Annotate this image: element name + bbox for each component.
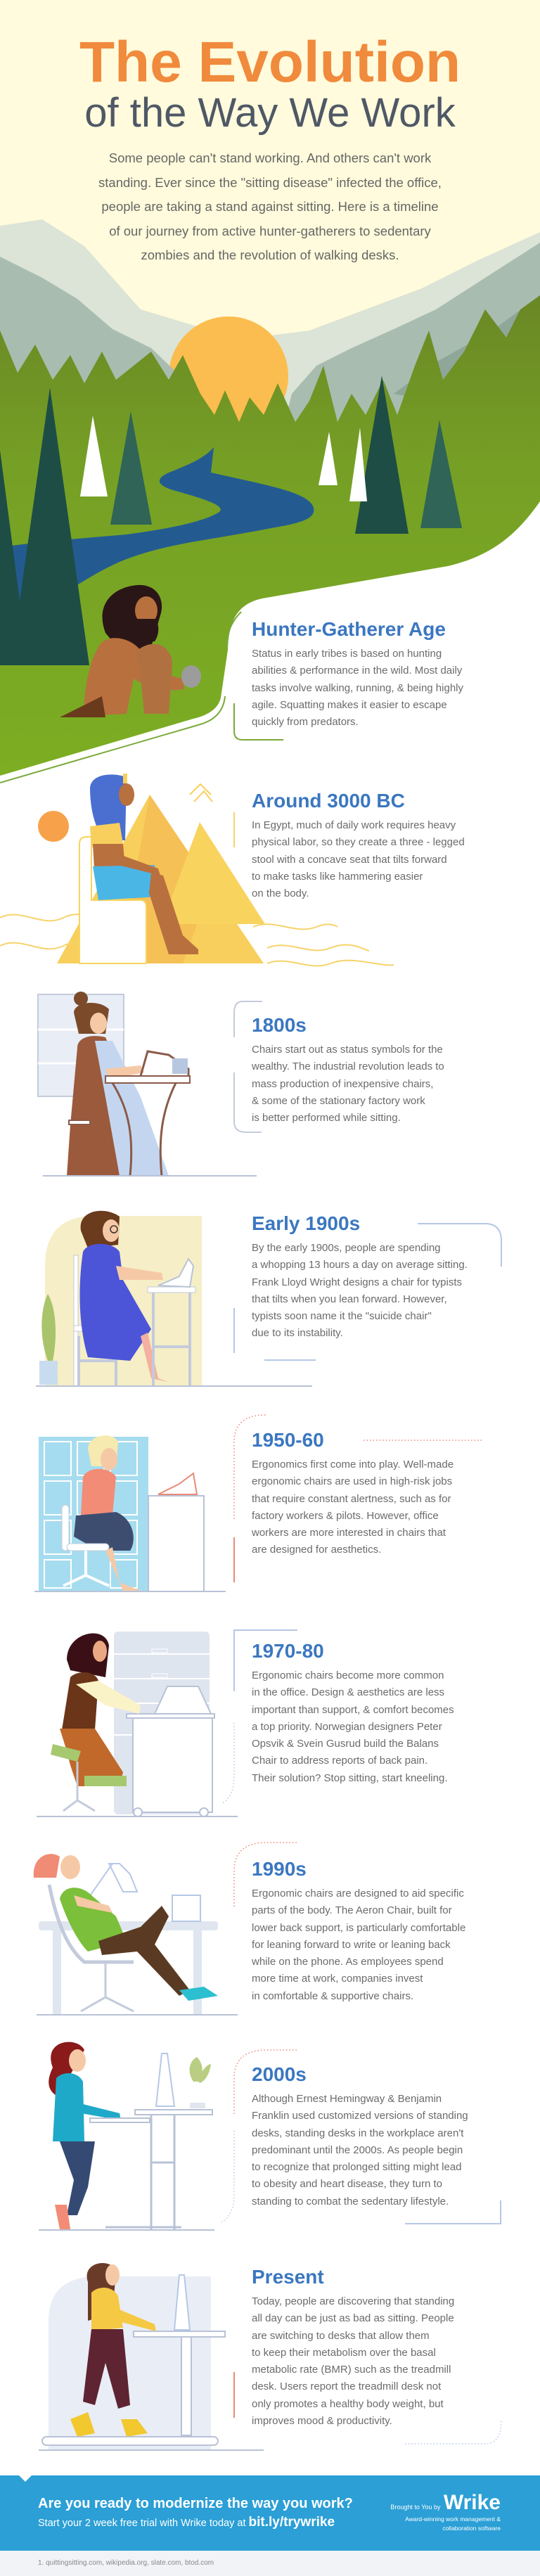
section: 1800s: is better performed while sitting. bbox=[252, 1112, 401, 1124]
section: early 1900s: By the early 1900s, people are spending bbox=[252, 1242, 441, 1254]
section: present: Today, people are discovering that standing bbox=[252, 2295, 454, 2307]
section: early 1900s: Frank Lloyd Wright designs a chair for typists bbox=[252, 1276, 462, 1288]
section: early 1900s: that tilts when you lean forward. However, bbox=[252, 1293, 447, 1305]
section: 1990s: in comfortable & supportive chairs. bbox=[252, 1990, 413, 2002]
intro paragraph: zombies and the revolution of walking desks. bbox=[141, 248, 399, 262]
hunter gatherer figure bbox=[60, 585, 201, 717]
section: around 3000 BC: Around 3000 BC bbox=[252, 790, 405, 812]
section: 1970-80: a top priority. Norwegian designers Peter bbox=[252, 1721, 442, 1733]
section: 1950-60: ergonomic chairs are used in high-risk jobs bbox=[252, 1475, 452, 1487]
bracket: hunter bbox=[226, 611, 283, 741]
section: 1990s bbox=[252, 1858, 465, 2002]
section: 1970-80: Ergonomic chairs become more common bbox=[252, 1670, 444, 1681]
section: around 3000 BC: stool with a concave seat that tilts forward bbox=[252, 854, 447, 866]
section: 2000s: predominant until the 2000s. As people begin bbox=[252, 2144, 463, 2156]
section: 1800s: 1800s bbox=[252, 1014, 307, 1036]
section: 2000s: Although Ernest Hemingway & Benjamin bbox=[252, 2093, 442, 2105]
section: early 1900s: Early 1900s bbox=[252, 1212, 360, 1234]
section: 1800s: wealthy. The industrial revolution leads to bbox=[252, 1060, 444, 1072]
section: present: desk. Users report the treadmill desk not bbox=[252, 2380, 441, 2392]
section: hunter-gatherer age: quickly from predators. bbox=[252, 716, 359, 728]
sources footer: 1. quittingsitting.com, wikipedia.org, slate.com, btod.com bbox=[38, 2559, 214, 2567]
section: 1990s: parts of the body. The Aeron Chair, built for bbox=[252, 1904, 452, 1916]
section: hunter-gatherer age: Hunter-Gatherer Age bbox=[252, 618, 446, 640]
section: present: metabolic rate (BMR) such as the treadmill bbox=[252, 2364, 451, 2376]
section: present: improves mood & productivity. bbox=[252, 2415, 392, 2427]
section: around 3000 BC: physical labor, so they create a three - legged bbox=[252, 836, 465, 848]
section: present bbox=[252, 2266, 454, 2427]
cta heading: Are you ready to modernize the way you work? bbox=[38, 2496, 353, 2511]
section: around 3000 BC: to make tasks like hammering easier bbox=[252, 871, 423, 883]
bracket: 1800s bbox=[233, 1001, 262, 1133]
bracket: 1990s bbox=[233, 1842, 297, 1907]
section: 1800s: Chairs start out as status symbols for the bbox=[252, 1044, 443, 1056]
section: 1990s: for leaning forward to write or leaning back bbox=[252, 1939, 451, 1951]
intro paragraph: of our journey from active hunter-gatherers to sedentary bbox=[109, 224, 431, 238]
section: 1970-80: 1970-80 bbox=[252, 1640, 324, 1662]
section: 1800s bbox=[252, 1014, 444, 1124]
section: 1970-80: Chair to address reports of back pain. bbox=[252, 1755, 428, 1767]
sun bbox=[169, 316, 288, 436]
section: 1950-60: Ergonomics first come into play. Well-made bbox=[252, 1459, 454, 1470]
bracket: 3000 BC bbox=[233, 812, 235, 847]
intro paragraph bbox=[98, 150, 442, 262]
section: 1970-80: Opsvik & Svein Gusrud build the Balans bbox=[252, 1738, 439, 1750]
illustration: 2000s bbox=[39, 2042, 214, 2231]
section: 1970-80 bbox=[252, 1640, 454, 1784]
section: 1950-60: that require constant alertness, such as for bbox=[252, 1493, 451, 1505]
section: around 3000 BC: In Egypt, much of daily work requires heavy bbox=[252, 819, 456, 831]
section: 2000s: 2000s bbox=[252, 2063, 307, 2085]
section: hunter-gatherer age bbox=[252, 618, 463, 728]
section: early 1900s: a whopping 13 hours a day on average sitting. bbox=[252, 1259, 468, 1271]
section: early 1900s bbox=[252, 1212, 468, 1339]
section: around 3000 BC: on the body. bbox=[252, 887, 309, 899]
illustration: 1990s bbox=[34, 1854, 238, 2016]
intro paragraph: Some people can't stand working. And others can't work bbox=[109, 150, 431, 165]
section: early 1900s: typists soon name it the "suicide chair" bbox=[252, 1310, 432, 1322]
call to action band bbox=[0, 2475, 540, 2551]
bracket: present bbox=[233, 2372, 502, 2444]
cta sub text: Start your 2 week free trial with Wrike today at bit.ly/trywrike bbox=[38, 2515, 335, 2530]
section: 1990s: Ergonomic chairs are designed to aid specific bbox=[252, 1888, 464, 1899]
brand block: Brought to You by Wrike bbox=[390, 2491, 501, 2514]
header background and landscape bbox=[0, 0, 540, 783]
illustration: 1970-80 bbox=[37, 1632, 238, 1817]
section: 1990s: lower back support, is particularly comfortable bbox=[252, 1922, 465, 1934]
mid mountains bbox=[0, 243, 540, 436]
section: 1950-60: 1950-60 bbox=[252, 1429, 324, 1451]
intro paragraph: people are taking a stand against sitting. Here is a timeline bbox=[101, 199, 439, 214]
trees bbox=[0, 376, 462, 665]
section: 2000s: Franklin used customized versions of standing bbox=[252, 2110, 468, 2122]
notch bbox=[19, 2475, 32, 2482]
section: present: are switching to desks that allow them bbox=[252, 2330, 430, 2342]
illustration: 1950-60 bbox=[34, 1435, 226, 1592]
section: present: only promotes a healthy body weight, but bbox=[252, 2398, 444, 2410]
bracket: early 1900s bbox=[233, 1223, 502, 1361]
section: 2000s: to obesity and heart disease, they turn to bbox=[252, 2178, 442, 2190]
section: 1990s: more time at work, companies invest bbox=[252, 1973, 423, 1985]
section: present: to keep their metabolism over the basal bbox=[252, 2347, 436, 2359]
section: 1950-60: factory workers & pilots. However, office bbox=[252, 1510, 439, 1522]
section: 1990s: while on the phone. As employees spend bbox=[252, 1956, 444, 1968]
bracket: 2000s bbox=[221, 2049, 501, 2224]
section: 1950-60: are designed for aesthetics. bbox=[252, 1544, 381, 1556]
section: hunter-gatherer age: tasks involve walking, running, & being highly bbox=[252, 682, 463, 694]
illustration: egypt bbox=[0, 774, 394, 966]
section: 2000s: to recognize that prolonged sitting might lead bbox=[252, 2161, 462, 2173]
section: hunter-gatherer age: agile. Squatting makes it easier to escape bbox=[252, 699, 447, 711]
white curve bbox=[0, 501, 540, 795]
section: 1950-60 bbox=[252, 1429, 454, 1556]
section: around 3000 BC bbox=[252, 790, 465, 899]
illustration: 1800s bbox=[37, 992, 257, 1177]
section: hunter-gatherer age: abilities & performance in the wild. Most daily bbox=[252, 665, 462, 677]
section: present: Present bbox=[252, 2266, 324, 2288]
subtitle: of the Way We Work bbox=[84, 90, 456, 136]
section: early 1900s: due to its instability. bbox=[252, 1327, 343, 1339]
section: 2000s bbox=[252, 2063, 468, 2207]
section: present: all day can be just as bad as sitting. People bbox=[252, 2312, 454, 2324]
section: hunter-gatherer age: Status in early tribes is based on hunting bbox=[252, 648, 442, 660]
sources footer bbox=[0, 2551, 540, 2576]
far mountains bbox=[0, 219, 540, 492]
illustration: early 1900s bbox=[36, 1211, 312, 1387]
brand block: Award-winning work management & bbox=[405, 2516, 501, 2523]
brand block bbox=[390, 2491, 501, 2532]
section: 2000s: desks, standing desks in the workplace aren't bbox=[252, 2127, 463, 2139]
intro paragraph: standing. Ever since the "sitting disease" infected the office, bbox=[98, 174, 442, 190]
section: 1970-80: important than support, & comfort becomes bbox=[252, 1704, 454, 1716]
section: 2000s: standing to combat the sedentary lifestyle. bbox=[252, 2196, 449, 2207]
section: 1970-80: Their solution? Stop sitting, start kneeling. bbox=[252, 1772, 447, 1784]
section: 1800s: mass production of inexpensive chairs, bbox=[252, 1078, 433, 1090]
brand block: collaboration software bbox=[442, 2525, 501, 2532]
bracket: 1950-60 bbox=[233, 1414, 482, 1582]
section: 1990s: 1990s bbox=[252, 1858, 307, 1880]
section: 1950-60: workers are more interested in chairs that bbox=[252, 1527, 446, 1539]
title: The Evolution bbox=[79, 30, 461, 94]
bracket: 1970-80 bbox=[223, 1629, 297, 1803]
section: 1970-80: in the office. Design & aesthetics are less bbox=[252, 1686, 444, 1698]
section: 1800s: & some of the stationary factory work bbox=[252, 1095, 425, 1107]
river bbox=[0, 447, 314, 631]
illustration: present bbox=[39, 2263, 264, 2451]
